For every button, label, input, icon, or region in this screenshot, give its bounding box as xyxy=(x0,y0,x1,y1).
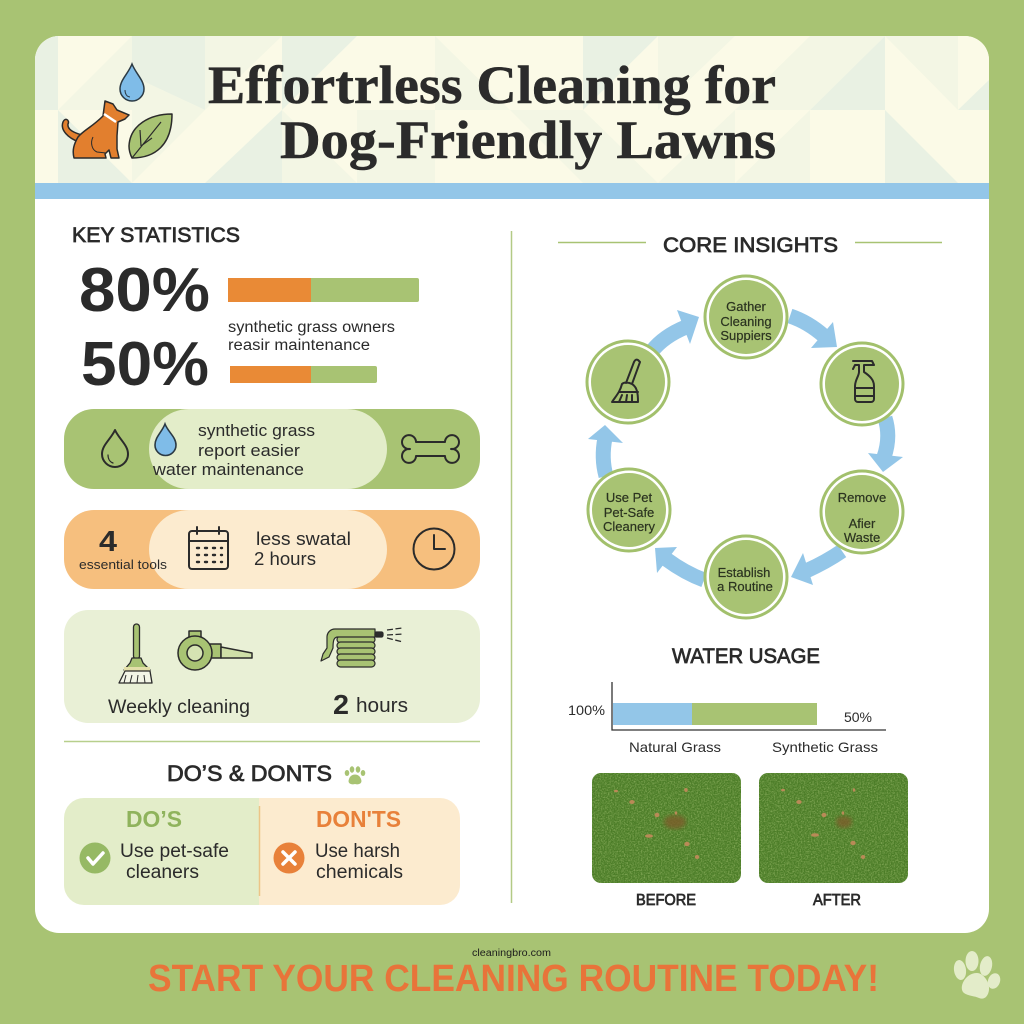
panel: do's and don'ts xyxy=(64,798,460,905)
step: broom xyxy=(587,341,669,423)
step: gather supplies: Gather xyxy=(726,299,767,314)
call to action: START YOUR CLEANING ROUTINE TODAY! xyxy=(148,958,879,1000)
header banner xyxy=(35,36,989,199)
chart: water usage: Natural Grass xyxy=(629,739,721,755)
step: gather supplies xyxy=(705,276,787,358)
icon: green paw xyxy=(345,766,365,784)
do's column: Use pet-safe xyxy=(120,841,229,862)
panel: cleaning tools xyxy=(64,610,480,723)
bar: 80% xyxy=(228,278,419,302)
label: weekly cleaning: Weekly cleaning xyxy=(108,697,250,718)
title xyxy=(208,55,776,170)
photo: after xyxy=(759,773,908,883)
label: 2 hours: 2 xyxy=(333,689,349,720)
heading: water usage: WATER USAGE xyxy=(672,645,820,668)
arrow: use to broom xyxy=(588,425,623,476)
label: after: AFTER xyxy=(813,892,861,909)
step: gather supplies: Cleaning xyxy=(720,314,772,329)
icon: dog xyxy=(62,101,129,158)
arrow: gather to spray xyxy=(790,316,837,348)
panel text: 2 hours xyxy=(254,549,316,569)
chart: water usage: Synthetic Grass xyxy=(772,739,878,755)
header blue band xyxy=(35,183,989,199)
don'ts column: DON'TS xyxy=(316,806,401,832)
icon: calendar xyxy=(189,527,228,569)
step: use cleaners xyxy=(588,469,670,551)
label: 2 hours xyxy=(333,689,408,720)
website credit: cleaningbro.com xyxy=(472,948,551,959)
title: Effortrless Cleaning for xyxy=(208,55,776,115)
stat: 50%: 50% xyxy=(81,330,209,399)
panel: water maintenance xyxy=(64,409,480,489)
title: Dog-Friendly Lawns xyxy=(280,110,776,170)
icon: broom xyxy=(119,624,152,683)
don'ts column: Use harsh xyxy=(315,841,400,862)
don'ts column: chemicals xyxy=(316,862,403,883)
chart: water usage: 50% xyxy=(844,709,872,725)
panel text: synthetic grass xyxy=(198,422,315,440)
do's column: DO’S xyxy=(126,806,182,832)
icon: check xyxy=(80,842,110,874)
icon: water drop xyxy=(120,64,144,101)
heading: core insights: CORE INSIGHTS xyxy=(663,234,838,257)
don'ts column xyxy=(274,806,403,883)
icon: leaf xyxy=(129,114,172,158)
stat description xyxy=(228,319,395,354)
stat: 4 essential tools: 4 xyxy=(99,526,117,558)
step: establish routine xyxy=(705,536,787,618)
panel: tools and time xyxy=(64,510,480,589)
step: use cleaners: Use Pet xyxy=(606,490,653,505)
stat: 4 essential tools xyxy=(79,526,167,572)
arrow: spray to remove xyxy=(868,418,903,472)
label: 2 hours: hours xyxy=(356,695,408,717)
do's column: cleaners xyxy=(126,862,199,883)
cycle diagram xyxy=(587,276,903,618)
chart: water usage: 100% xyxy=(568,702,605,718)
arrow: remove to establish xyxy=(791,551,842,585)
icon: leaf blower xyxy=(178,631,252,670)
step: remove waste xyxy=(821,471,903,553)
stat: 80%: 80% xyxy=(79,256,210,325)
icon: cross xyxy=(274,842,304,874)
step: use cleaners: Pet-Safe xyxy=(604,505,654,520)
stat: 4 essential tools: essential tools xyxy=(79,558,167,572)
icon: clock xyxy=(414,528,454,570)
heading: do's and don'ts: DO’S & DONTS xyxy=(167,761,332,786)
step: establish routine: Establish xyxy=(718,565,770,580)
step: spray bottle xyxy=(821,343,903,425)
icon: footer paw xyxy=(953,951,1002,999)
step: remove waste: Remove xyxy=(838,490,886,505)
icon: blue drop xyxy=(155,424,176,456)
step: remove waste: Waste xyxy=(844,530,880,545)
step: gather supplies: Suppiers xyxy=(720,328,772,343)
panel text: water maintenance xyxy=(152,461,304,479)
panel text: report easier xyxy=(198,442,301,460)
bar: 50% xyxy=(230,366,377,383)
step: establish routine: a Routine xyxy=(717,579,773,594)
panel text xyxy=(152,422,315,479)
panel text xyxy=(254,529,351,569)
step: use cleaners: Cleanery xyxy=(603,519,656,534)
icon: garden hose xyxy=(321,628,403,667)
chart: water usage xyxy=(568,682,886,755)
panel text: less swatal xyxy=(256,529,351,549)
arrow: broom to gather xyxy=(652,310,699,351)
do's column xyxy=(80,806,229,883)
stat description: reasir maintenance xyxy=(228,337,370,354)
photo: before xyxy=(592,773,741,883)
label: before: BEFORE xyxy=(636,892,696,909)
icon: outline drop xyxy=(102,430,128,467)
stat description: synthetic grass owners xyxy=(228,319,395,336)
icon: bone xyxy=(402,435,459,463)
step: remove waste: Aﬁer xyxy=(849,516,876,531)
arrow: establish to use xyxy=(655,547,704,580)
heading: key statistics: KEY STATISTICS xyxy=(72,224,240,247)
